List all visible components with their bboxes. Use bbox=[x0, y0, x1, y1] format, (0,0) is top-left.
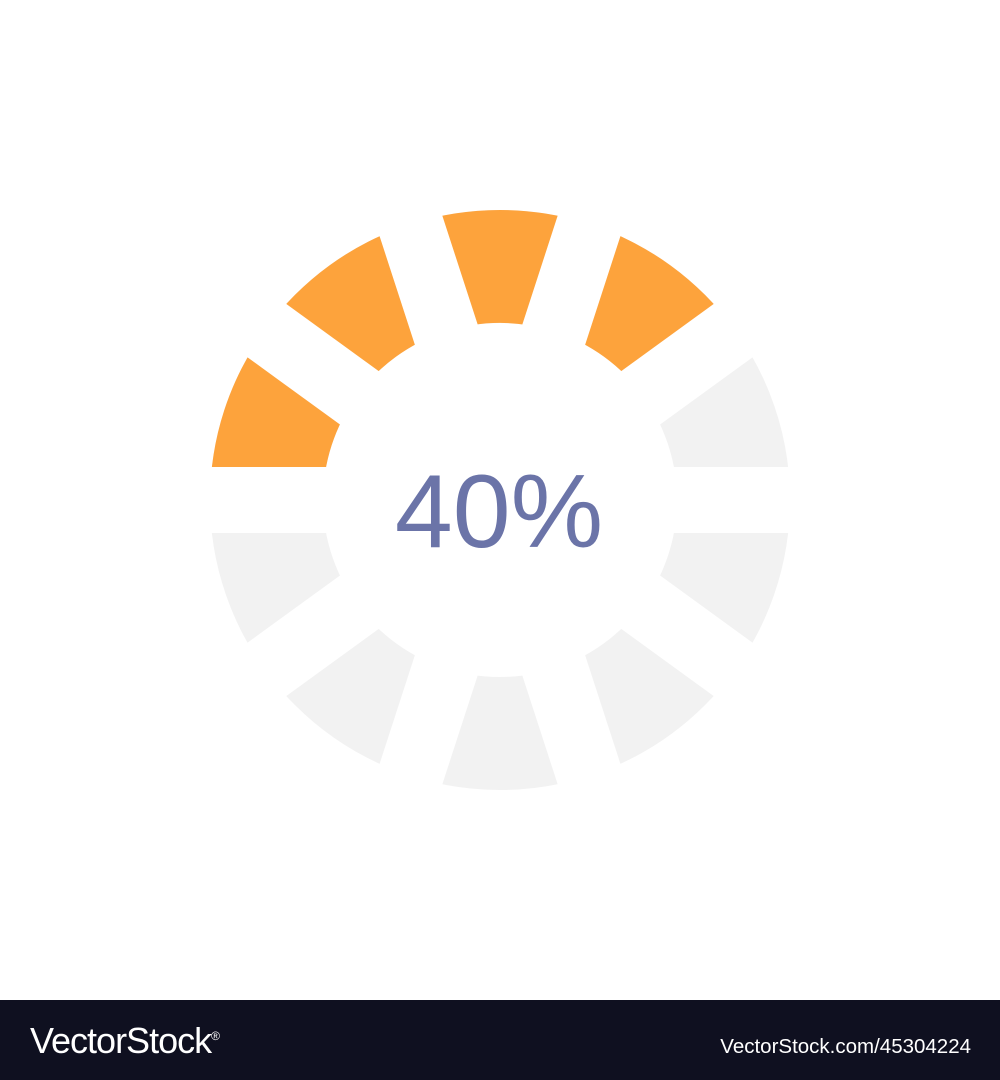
percentage label: 40% bbox=[395, 454, 603, 570]
grey track ring bbox=[266, 266, 734, 734]
orange filled segments bbox=[210, 210, 735, 500]
footer id: VectorStock.com/45304224 bbox=[720, 1035, 971, 1058]
footer brand: VectorStock® bbox=[30, 1020, 219, 1061]
footer bar bbox=[0, 1000, 1000, 1080]
